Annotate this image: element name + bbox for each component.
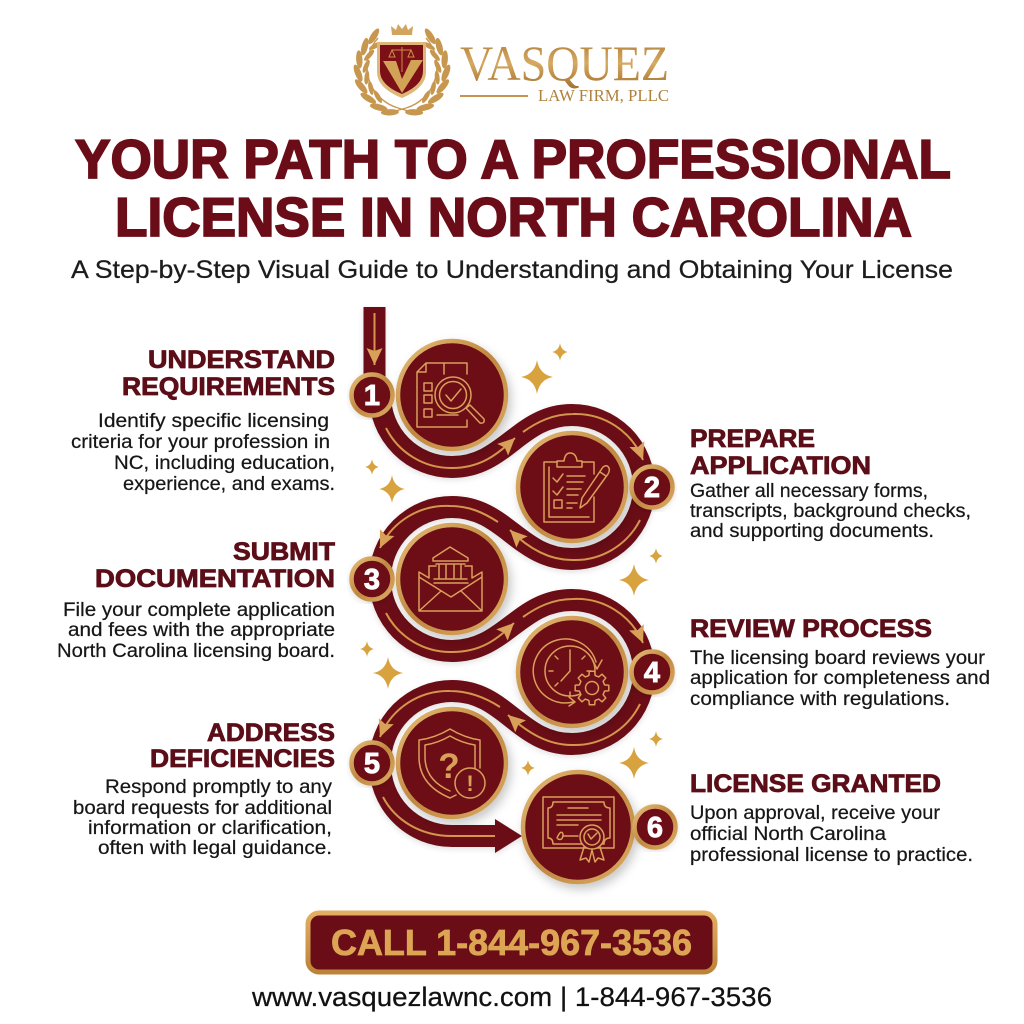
wordmark rule — [460, 95, 528, 97]
step 2 circle: clipboard and pen — [518, 433, 626, 541]
step 1 badge: 1 — [364, 380, 380, 412]
title: YOUR PATH TO A PROFESSIONAL — [75, 128, 951, 190]
step 3 text: submit documentation: DOCUMENTATION — [95, 565, 335, 593]
wordmark: VASQUEZ: VASQUEZ — [460, 35, 669, 91]
step 6 text: license granted: LICENSE GRANTED — [690, 770, 941, 798]
step 6 badge: 6 — [647, 812, 663, 844]
arrow: path end — [495, 819, 522, 853]
sparkles — [360, 343, 663, 779]
step 5 text: address deficiencies: ADDRESS — [207, 719, 335, 747]
step 1 badge — [352, 374, 392, 416]
step 2 text: prepare application: PREPARE — [690, 425, 815, 453]
step 4 badge — [632, 652, 672, 692]
step 5 badge — [352, 742, 392, 784]
step 6 text: license granted: Upon approval, receive your — [690, 803, 941, 824]
step 6 badge — [634, 806, 676, 848]
step 1 circle: document with magnifier — [398, 341, 506, 449]
step 5 text: address deficiencies: Respond promptly to any — [105, 777, 333, 798]
step 5 text: address deficiencies: information or clarification, — [88, 818, 332, 839]
step 6 text: license granted — [690, 770, 973, 866]
step 3 text: submit documentation — [57, 538, 335, 662]
step 5 badge: 5 — [364, 748, 380, 780]
step 1 text: understand requirements — [71, 346, 335, 495]
step 2 badge — [632, 466, 672, 508]
step 3 text: submit documentation: SUBMIT — [233, 538, 335, 566]
step 3 badge — [352, 558, 392, 600]
call to action button: CALL 1-844-967-3536 — [331, 922, 692, 963]
step 5 circle: shield with question mark: ? — [438, 747, 460, 786]
title — [75, 128, 951, 248]
step 4 text: review process: REVIEW PROCESS — [690, 615, 932, 643]
step 6 text: license granted: official North Carolina — [690, 824, 886, 845]
step 4 text: review process: compliance with regulations. — [690, 689, 950, 710]
winding path ribbon — [374, 307, 644, 853]
step 4 text: review process: The licensing board reviews your — [690, 648, 986, 669]
step 4 text: review process: application for completeness and — [690, 668, 990, 689]
step 3 text: submit documentation: and fees with the appropriate — [68, 620, 335, 641]
subtitle: A Step-by-Step Visual Guide to Understanding and Obtaining Your License — [71, 256, 953, 284]
step 2 text: prepare application: and supporting documents. — [690, 521, 934, 542]
icon: shield — [377, 42, 426, 98]
wordmark: law firm: LAW FIRM, PLLC — [538, 86, 669, 105]
step 5 text: address deficiencies: often with legal guidance. — [98, 838, 332, 859]
step 4 badge: 4 — [644, 657, 660, 689]
step 2 text: prepare application — [690, 425, 971, 542]
step 2 text: prepare application: transcripts, background checks, — [690, 501, 971, 522]
step 5 text: address deficiencies: DEFICIENCIES — [150, 745, 335, 773]
step 4 circle: clock and gear — [518, 618, 626, 726]
logo: Vasquez Law Firm — [351, 24, 669, 121]
step 1 text: understand requirements: UNDERSTAND — [148, 346, 335, 374]
gold flow arrows — [374, 313, 643, 836]
step 1 text: understand requirements: REQUIREMENTS — [122, 373, 335, 401]
step 3 badge: 3 — [364, 564, 380, 596]
step 1 text: understand requirements: Identify specific licensing — [98, 411, 329, 432]
step 3 circle: envelope with courthouse — [398, 525, 506, 633]
step 3 text: submit documentation: North Carolina licensing board. — [57, 641, 335, 662]
icon: crown — [391, 24, 413, 35]
step 5 circle: shield with question mark — [398, 709, 506, 817]
call to action button — [308, 913, 715, 972]
step 2 text: prepare application: APPLICATION — [690, 452, 871, 480]
step 6 circle: certificate with seal — [523, 772, 633, 882]
step 4 text: review process — [690, 615, 990, 710]
step 5 text: address deficiencies — [73, 719, 335, 859]
step 5 circle: shield with question mark: ! — [466, 771, 474, 796]
step 2 text: prepare application: Gather all necessary forms, — [690, 481, 928, 502]
step 3 text: submit documentation: File your complete application — [63, 600, 335, 621]
title: LICENSE IN NORTH CAROLINA — [115, 186, 912, 248]
step 5 text: address deficiencies: board requests for additional — [73, 798, 332, 819]
step 1 text: understand requirements: NC, including education, — [114, 453, 335, 474]
footer contact line: www.vasquezlawnc.com | 1-844-967-3536 — [251, 982, 772, 1012]
step 2 badge: 2 — [644, 472, 660, 504]
icon: laurel wreath — [351, 26, 453, 121]
step 1 text: understand requirements: criteria for your profession in — [71, 432, 330, 453]
step 6 text: license granted: professional license to practice. — [690, 845, 973, 866]
step 1 text: understand requirements: experience, and exams. — [123, 474, 335, 495]
